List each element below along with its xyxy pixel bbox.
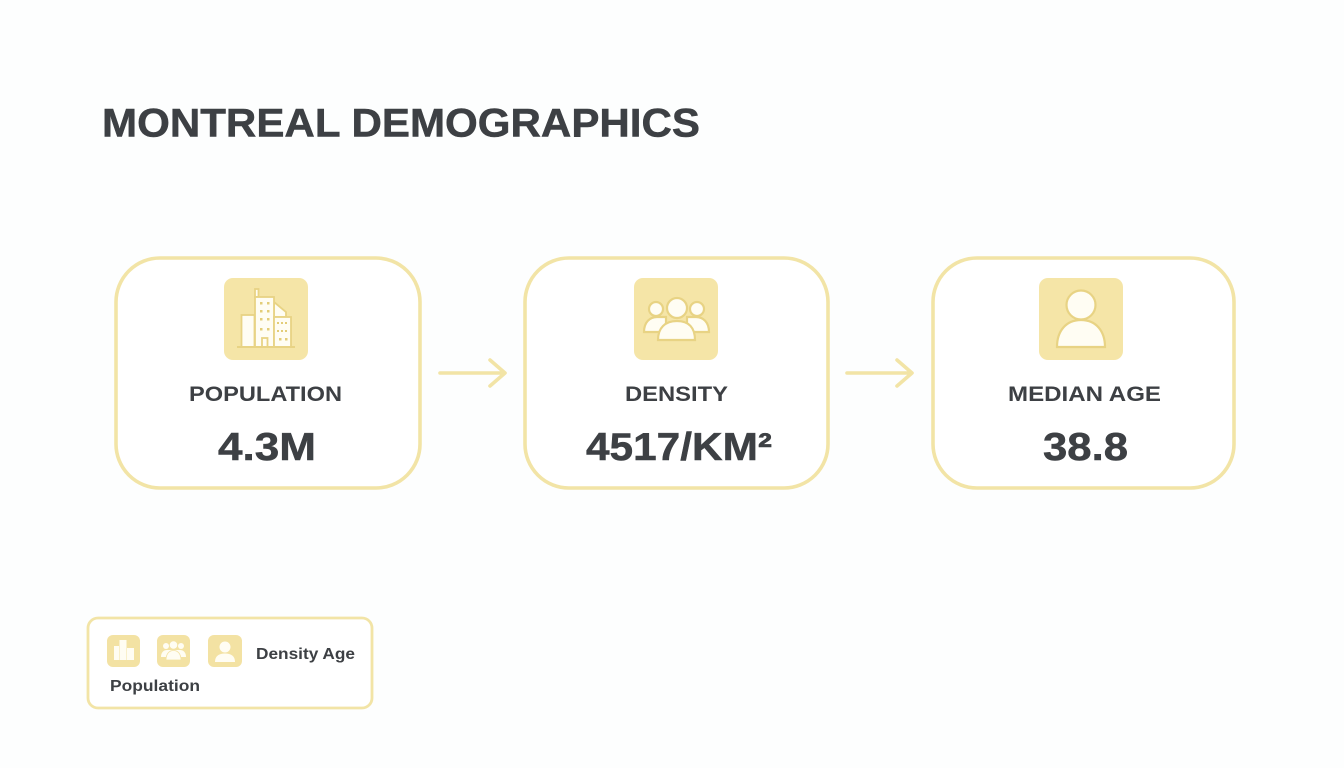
title: MONTREAL DEMOGRAPHICS [102, 102, 700, 146]
legend icon: population [107, 635, 140, 667]
arrow: density to median age [847, 360, 912, 386]
legend [88, 618, 372, 708]
legend icon: density [157, 635, 190, 667]
value: density: 4517/KM² [586, 426, 772, 469]
label: density: DENSITY [625, 382, 728, 406]
legend icon: age [208, 635, 242, 667]
icon: city buildings [224, 278, 308, 360]
label: population: POPULATION [189, 382, 342, 406]
value: population: 4.3M [218, 426, 316, 469]
label: median age: MEDIAN AGE [1008, 382, 1161, 406]
icon: group of people [634, 278, 718, 360]
panel: median age [933, 258, 1234, 488]
arrow: population to density [440, 360, 505, 386]
value: median age: 38.8 [1043, 426, 1128, 469]
icon: person [1039, 278, 1123, 360]
panel: population [116, 258, 420, 488]
legend text: density age: Density Age [256, 646, 355, 663]
panel: density [525, 258, 828, 488]
legend text: population: Population [110, 678, 200, 695]
